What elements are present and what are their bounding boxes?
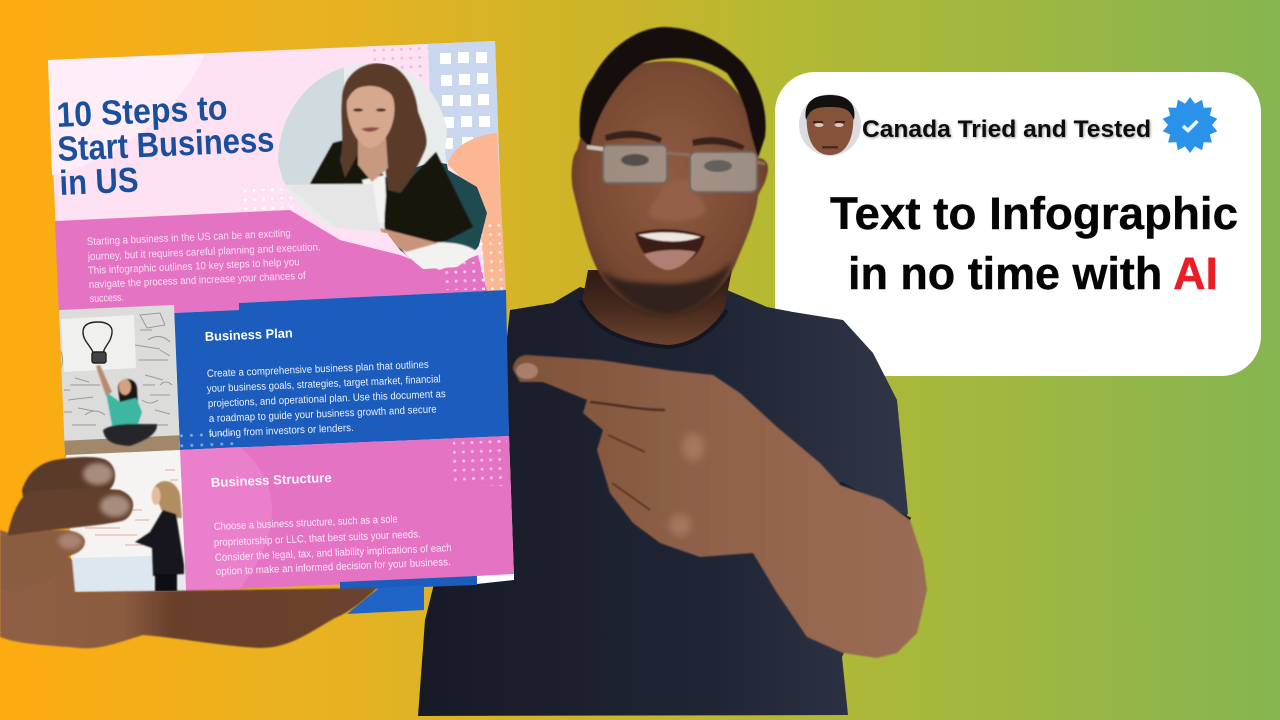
shirt xyxy=(418,287,908,716)
intro text: This infographic outlines 10 key steps to help you xyxy=(88,256,300,277)
finger two xyxy=(8,489,133,536)
dots: white on light pink xyxy=(238,186,298,210)
raised arm xyxy=(96,365,112,396)
collar shadow xyxy=(580,300,727,347)
poster base xyxy=(48,41,514,592)
fingernail xyxy=(516,363,538,379)
finger one xyxy=(22,457,115,505)
icon: verified badge xyxy=(1163,97,1217,153)
forearm xyxy=(380,228,438,252)
bottom white strip xyxy=(477,574,514,584)
intro text: success. xyxy=(90,292,124,305)
face xyxy=(347,86,394,148)
intro text: journey, but it requires careful planning and execution. xyxy=(87,241,321,263)
dots: section xyxy=(453,440,507,486)
shirt xyxy=(362,175,386,222)
dots: blue xyxy=(180,433,238,450)
title line 1: 10 Steps to xyxy=(56,88,228,135)
panel: infographic poster xyxy=(48,41,514,594)
left hand holding poster xyxy=(0,457,377,648)
body text xyxy=(207,359,446,440)
jacket xyxy=(135,510,184,576)
crease under finger xyxy=(590,402,665,410)
intro text xyxy=(87,227,321,305)
crossed legs xyxy=(103,424,157,446)
body text: your business goals, strategies, target market, financial xyxy=(207,373,441,395)
decorative light sweep xyxy=(48,54,205,175)
mouth xyxy=(635,229,705,270)
icon: channel avatar xyxy=(799,94,861,156)
finger creases xyxy=(608,435,650,510)
neck xyxy=(582,270,732,346)
peach shape xyxy=(448,133,506,291)
body text: projections, and operational plan. Use this document as xyxy=(208,388,446,410)
body text: Consider the legal, tax, and liability implications of each xyxy=(215,542,452,564)
glasses xyxy=(603,145,667,183)
title line 3: in US xyxy=(59,160,139,203)
bottom blue strip xyxy=(340,576,477,590)
body text: funding from investors or lenders. xyxy=(209,422,354,440)
body text: a roadmap to guide your business growth and secure xyxy=(209,403,437,425)
hand and forearm silhouette xyxy=(513,355,927,658)
palm and forearm xyxy=(0,530,377,648)
ears and face xyxy=(572,61,768,316)
hair xyxy=(153,481,182,518)
beard shadow xyxy=(600,262,732,316)
light bulb xyxy=(83,322,112,363)
panel: business plan xyxy=(174,290,509,450)
panel: headline card xyxy=(775,72,1261,376)
blue section background xyxy=(174,290,509,450)
hair xyxy=(580,27,766,158)
headline line 2: in no time with AI xyxy=(848,248,1218,299)
floor xyxy=(64,435,180,456)
presenter: torso and head xyxy=(418,27,910,716)
body text: Choose a business structure, such as a sole xyxy=(214,513,398,533)
photo: woman at whiteboard xyxy=(66,450,186,592)
lavender block xyxy=(428,41,499,163)
blue poster page behind arm xyxy=(347,585,424,614)
laptop xyxy=(290,182,378,222)
pink intro band xyxy=(55,210,487,317)
sleeve hem xyxy=(840,484,910,520)
photo: woman with laptop xyxy=(278,63,487,269)
white squares xyxy=(440,52,490,149)
fingertips xyxy=(83,463,113,485)
neck xyxy=(358,138,388,182)
body text xyxy=(214,513,452,578)
dots: white on peach xyxy=(476,220,504,290)
intro text: navigate the process and increase your chances of xyxy=(89,270,306,291)
photo: woman with light bulb sign xyxy=(59,305,180,456)
body text: option to make an informed decision for your business. xyxy=(216,556,451,578)
panel: business structure xyxy=(180,436,514,591)
decorative light curve xyxy=(180,447,272,591)
dots: white on pink xyxy=(443,262,487,290)
body text: Create a comprehensive business plan that outlines xyxy=(207,359,429,380)
nose xyxy=(649,178,706,221)
face xyxy=(152,487,160,505)
body text: proprietorship or LLC, that best suits your needs. xyxy=(214,528,421,549)
headline line 1: Text to Infographic xyxy=(830,188,1238,239)
heading: Business Structure xyxy=(210,470,332,490)
channel name: Canada Tried and Tested xyxy=(862,116,1151,143)
table xyxy=(402,240,476,269)
pink section background xyxy=(180,436,514,591)
finger three xyxy=(0,530,85,590)
presenter: pointing hand and arm xyxy=(513,355,927,658)
dots: top xyxy=(368,47,428,95)
heading: Business Plan xyxy=(204,325,293,344)
blazer xyxy=(310,140,473,244)
teal top xyxy=(106,392,142,430)
hair xyxy=(340,63,426,193)
knuckle highlights xyxy=(682,433,704,461)
intro text: Starting a business in the US can be an exciting xyxy=(87,227,291,248)
title line 2: Start Business xyxy=(57,120,275,169)
eyes xyxy=(621,154,649,166)
head xyxy=(572,27,768,316)
hair and head xyxy=(118,379,138,408)
trousers xyxy=(155,574,177,594)
sign xyxy=(61,315,136,372)
eyebrows xyxy=(605,131,662,143)
